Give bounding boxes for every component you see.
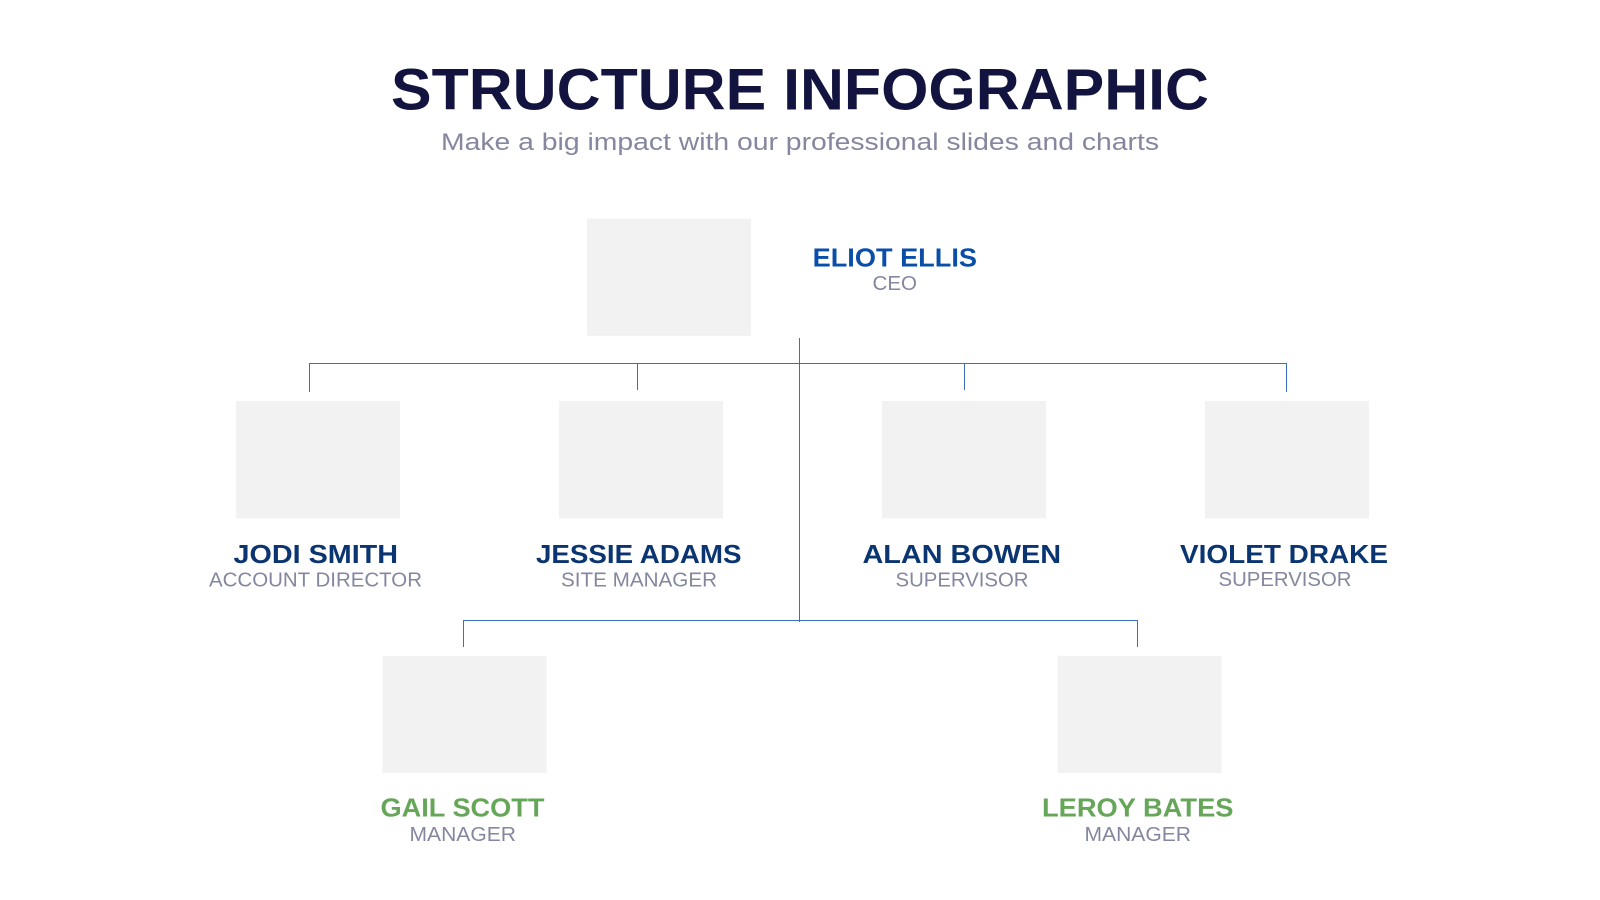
node: Alan Bowen, Supervisor	[862, 401, 1061, 592]
role: Site Manager: SITE MANAGER	[561, 570, 717, 592]
name: Gail Scott: GAIL SCOTT	[380, 792, 545, 822]
photo placeholder: Violet Drake	[1205, 401, 1369, 518]
photo placeholder: Gail Scott	[383, 656, 547, 773]
node: Leroy Bates, Manager	[1042, 656, 1234, 846]
node: Jodi Smith, Account Director	[209, 401, 422, 592]
title: STRUCTURE INFOGRAPHIC	[391, 58, 1209, 122]
role: Account Director: ACCOUNT DIRECTOR	[209, 570, 422, 592]
node: Eliot Ellis, CEO	[587, 219, 977, 336]
name: Alan Bowen: ALAN BOWEN	[862, 539, 1061, 569]
subtitle: Make a big impact with our professional slides and charts	[441, 129, 1159, 156]
name: Leroy Bates: LEROY BATES	[1042, 792, 1234, 822]
name: Jessie Adams: JESSIE ADAMS	[536, 539, 742, 569]
role: Manager: MANAGER	[1084, 824, 1191, 846]
role: Manager: MANAGER	[410, 824, 516, 846]
role: Supervisor: SUPERVISOR	[896, 570, 1028, 592]
photo placeholder: Jodi Smith	[236, 401, 400, 518]
name: Violet Drake: VIOLET DRAKE	[1180, 539, 1388, 569]
name: Eliot Ellis: ELIOT ELLIS	[813, 242, 977, 272]
photo placeholder: Jessie Adams	[559, 401, 723, 518]
name: Jodi Smith: JODI SMITH	[234, 539, 398, 569]
role: CEO: CEO	[872, 273, 917, 295]
photo placeholder: Leroy Bates	[1058, 656, 1222, 773]
connector lines	[310, 338, 1286, 647]
photo placeholder: Eliot Ellis	[587, 219, 751, 336]
node: Jessie Adams, Site Manager	[536, 401, 742, 592]
node: Gail Scott, Manager	[380, 656, 547, 846]
role: Supervisor: SUPERVISOR	[1218, 569, 1352, 591]
node: Violet Drake, Supervisor	[1180, 401, 1388, 591]
photo placeholder: Alan Bowen	[882, 401, 1046, 518]
